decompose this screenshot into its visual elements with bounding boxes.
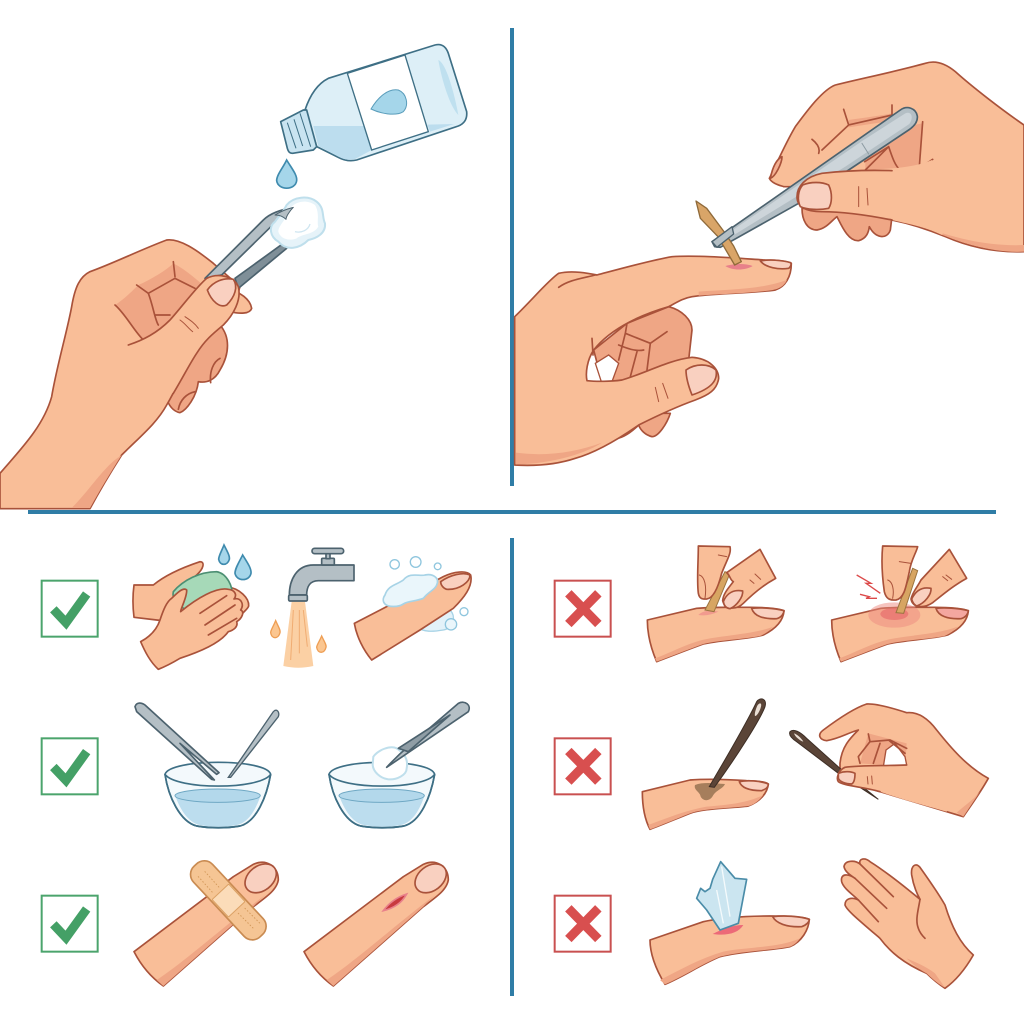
icon: hand with tweezers [712,62,1024,252]
icon: squeezing splinter [647,546,784,662]
panel: incorrect methods [555,546,988,988]
icon: hand with dirty needle [790,704,988,817]
panel: soaking cotton with antiseptic [0,45,467,509]
icon: tweezer tips [712,227,734,247]
icon: cross box 1 [555,581,611,637]
icon: inflamed squeezed splinter [832,546,968,662]
icon: finger with cut [304,858,452,986]
icon: falling drop [277,160,297,188]
icon: running faucet [271,548,354,668]
icon: open hand [841,859,973,988]
icon: cross box 3 [555,896,611,952]
icon: bowl with tweezers and needle [135,703,279,828]
panel: correct methods [42,545,471,986]
icon: check box 1 [42,581,98,637]
icon: check box 3 [42,896,98,952]
icon: glass shard in finger [650,862,809,984]
icon: antiseptic bottle [281,45,467,161]
icon: bowl with cotton swab [329,702,469,828]
icon: check box 2 [42,738,98,794]
icon: dirty needle in finger [642,699,768,829]
icon: hand with splintered finger [515,256,791,465]
icon: cross box 2 [555,738,611,794]
icon: finger with bandage [134,856,282,986]
icon: soapy finger [354,557,471,660]
icon: hand holding tweezers with cotton [0,198,325,509]
panel: pulling splinter with tweezers [515,62,1024,465]
icon: splinter [696,201,741,265]
icon: washing hands with soap [133,545,251,669]
